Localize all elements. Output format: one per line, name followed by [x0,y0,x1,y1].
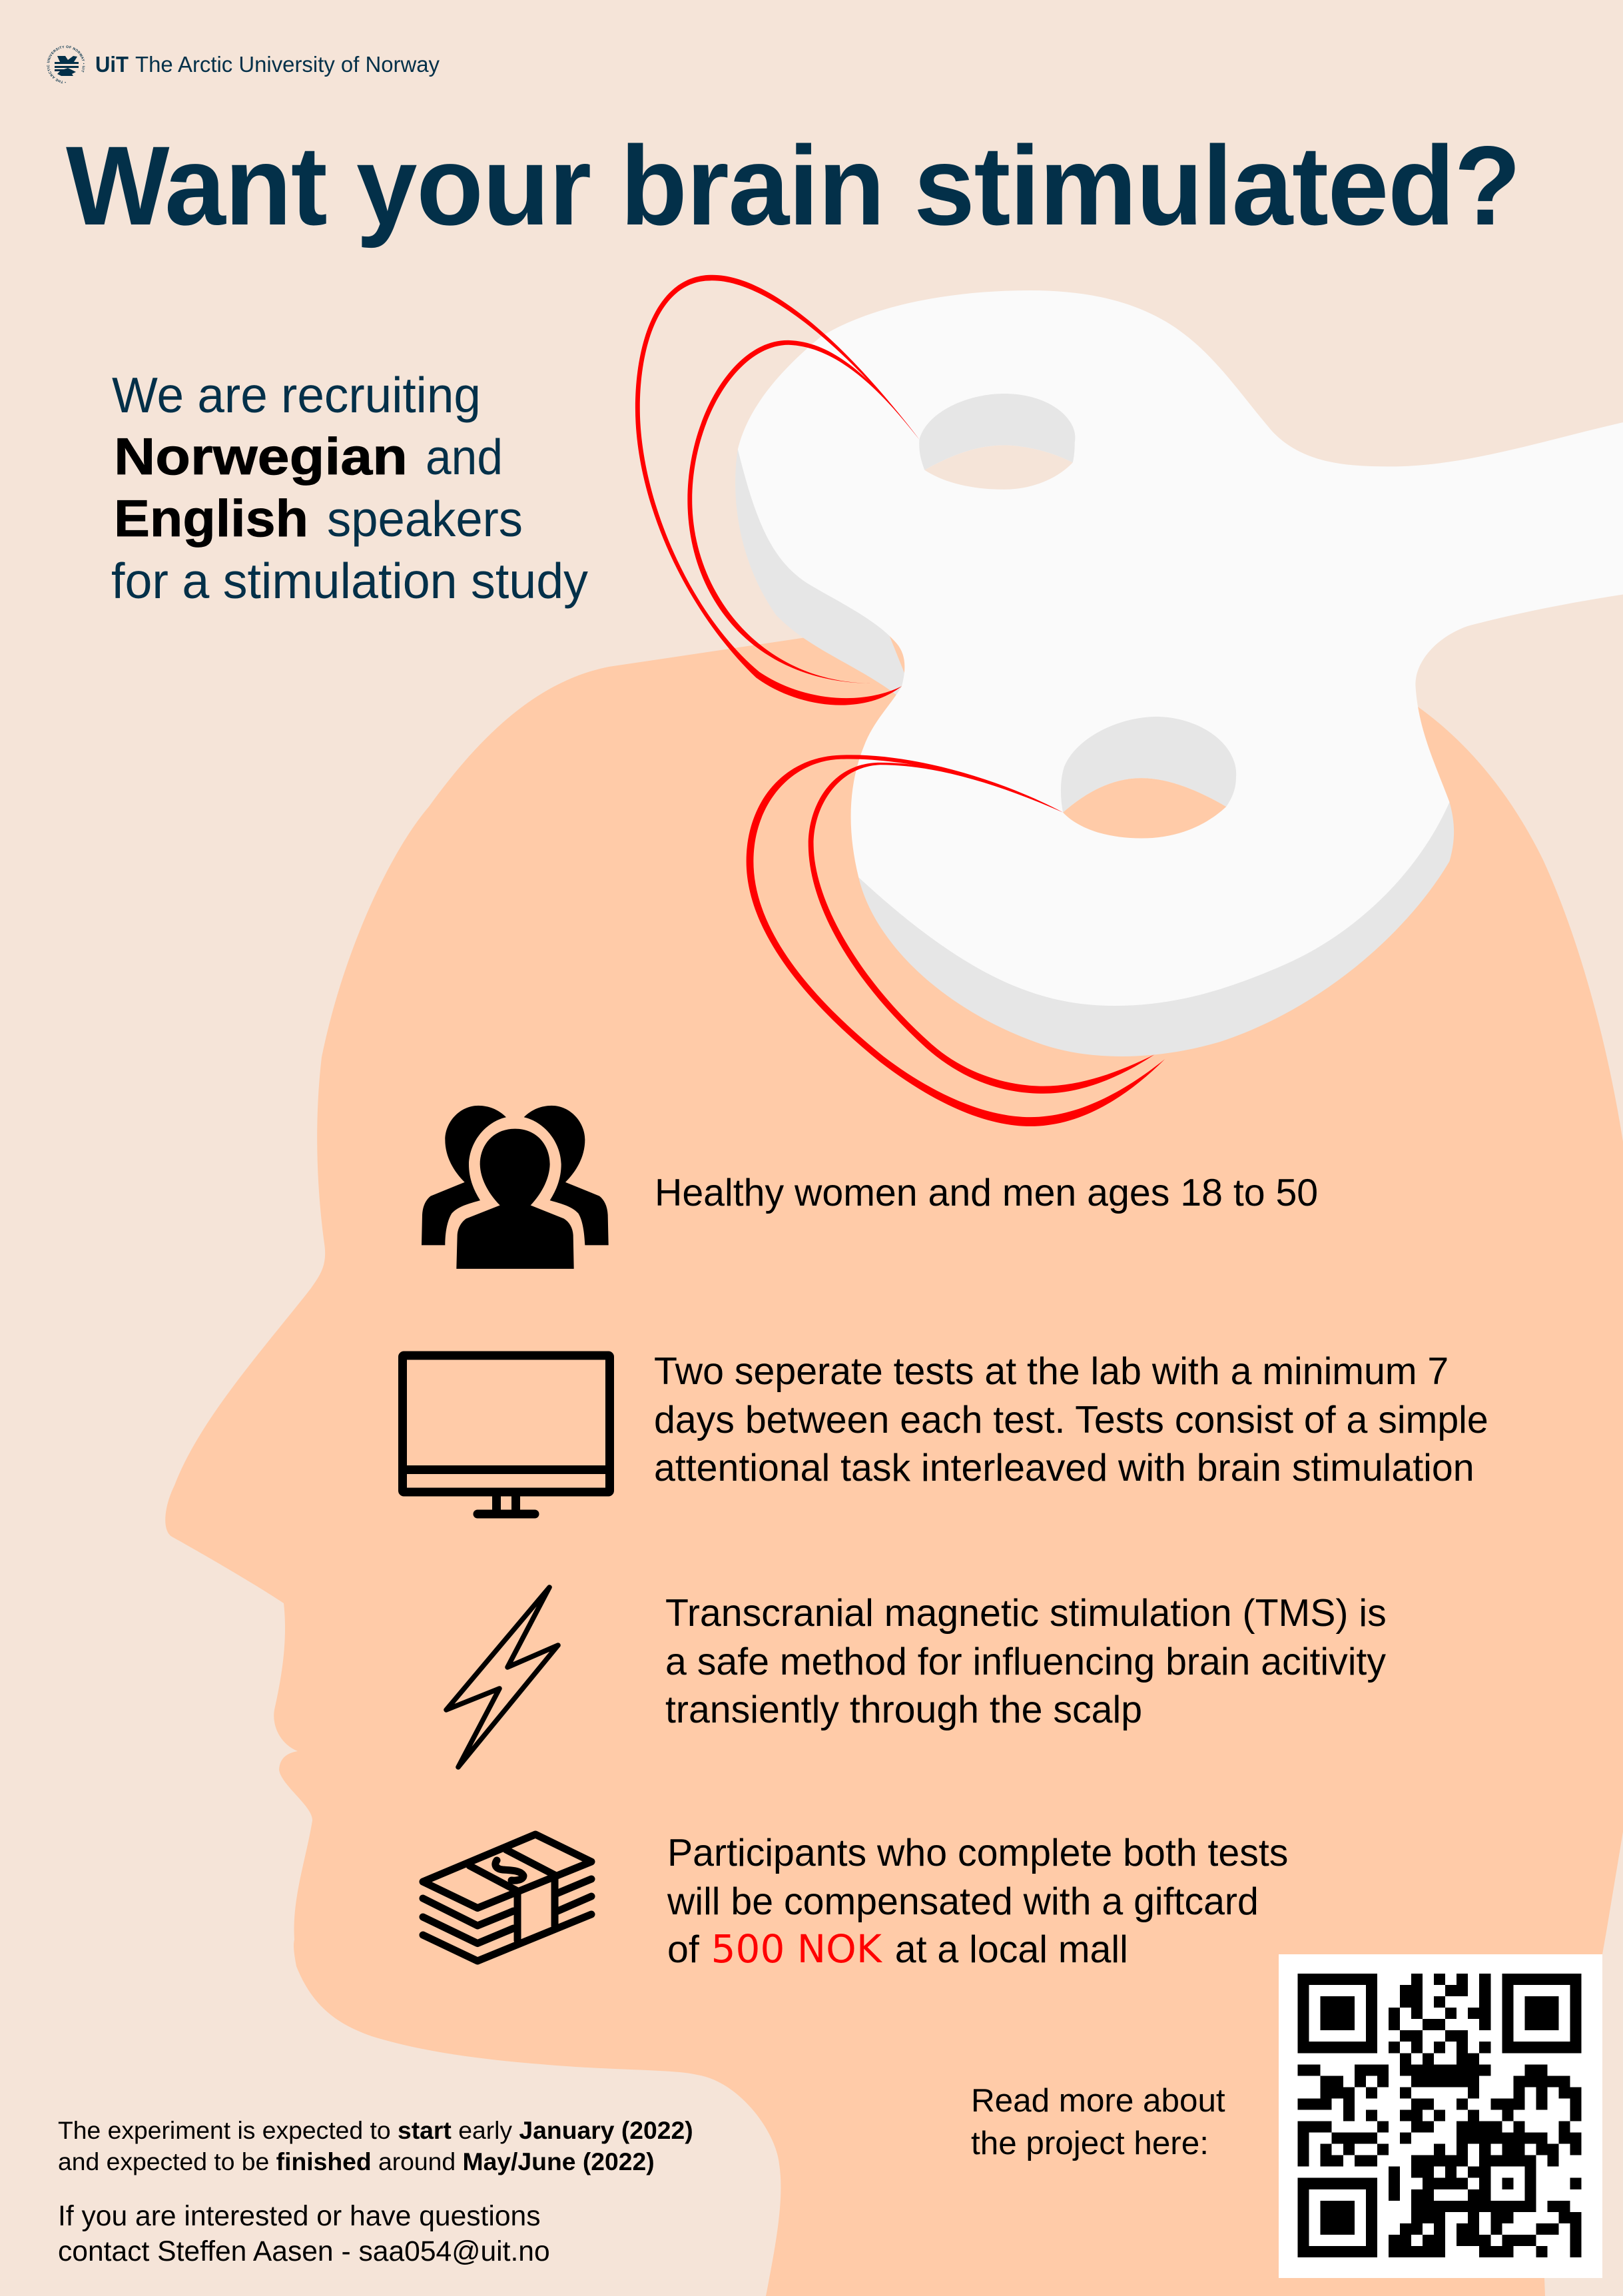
icon: stack of money [423,1834,591,1961]
text: test description: days between each test. Tests consist of a simple [654,1399,1488,1441]
coil side shading [735,450,1454,1056]
logo wordmark: The Arctic University of Norway [135,52,440,77]
QR code [1279,1954,1602,2278]
text: compensation: Participants who complete both tests [667,1832,1288,1874]
recruiting text block: and [426,429,503,485]
text: read more prompt: the project here: [971,2125,1209,2161]
text: TMS description: Transcranial magnetic stimulation (TMS) is [665,1592,1387,1635]
text: TMS description [665,1592,1387,1731]
icon: computer monitor [400,1355,613,1514]
coil lower hole [1061,717,1236,839]
title: Want your brain stimulated? [66,123,1521,248]
recruiting text block: speakers [327,491,523,547]
icon: university emblem: • THE ARCTIC UNIVERSITY OF NORWAY • UIT [47,45,85,84]
logo wordmark: UiT [95,52,129,77]
recruiting text block [111,367,588,609]
text: schedule: The experiment is expected to start early January (2022) [58,2116,693,2144]
magnetic field arcs [635,275,1165,1126]
head silhouette [165,599,1623,2296]
text: TMS description: transiently through the scalp [665,1689,1142,1731]
text: contact: If you are interested or have questions [58,2200,541,2232]
text: schedule [58,2116,693,2175]
text: test description: attentional task interleaved with brain stimulation [654,1447,1474,1489]
text: eligibility: Healthy women and men ages 18 to 50 [655,1172,1318,1214]
text: schedule: and expected to be finished around May/June (2022) [58,2147,655,2175]
text: contact [58,2200,550,2267]
recruiting text block: English [114,489,308,548]
recruiting text block: Norwegian [114,427,408,486]
text: compensation: will be compensated with a giftcard [667,1880,1259,1923]
icon: group of people [422,1106,609,1269]
recruiting text block: for a stimulation study [111,553,588,609]
text: TMS description: a safe method for influencing brain acitivity [665,1641,1386,1683]
text: test description: Two seperate tests at the lab with a minimum 7 [654,1350,1449,1393]
recruiting text block: We are recruiting [112,367,481,423]
coil top face [738,290,1623,1006]
stimulation coil [635,275,1623,1126]
text: compensation: of 500 NOK at a local mall [667,1926,1128,1972]
text: test description [654,1350,1488,1489]
logo: UiT The Arctic University of Norway [47,45,440,84]
text: contact: contact Steffen Aasen - saa054@uit.no [58,2235,550,2267]
coil upper hole [919,394,1075,490]
text: read more prompt [971,2082,1225,2161]
text: read more prompt: Read more about [971,2082,1225,2119]
text: compensation [667,1832,1288,1972]
icon: lightning bolt [446,1587,558,1767]
